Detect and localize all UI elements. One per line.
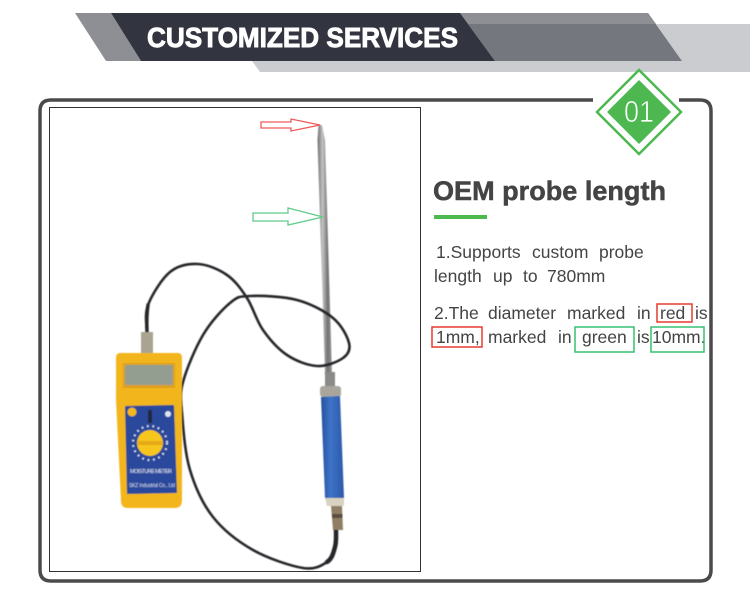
- heading: OEM probe length: [433, 176, 666, 206]
- badge number: 01: [624, 94, 654, 129]
- paragraph 2: is: [637, 327, 650, 347]
- cable: [146, 264, 350, 568]
- paragraph 1: to: [523, 266, 538, 286]
- green highlight boxes: [575, 327, 704, 352]
- paragraph 2: 2.The: [434, 303, 479, 323]
- heading underline: [434, 215, 487, 219]
- probe shaft: [318, 125, 332, 374]
- paragraph 1: up: [493, 266, 512, 286]
- paragraph 1: custom: [532, 242, 588, 262]
- paragraph 2: 1mm,: [436, 327, 480, 347]
- paragraph 2: red: [660, 303, 685, 323]
- paragraph 1: 1.Supports: [436, 242, 521, 262]
- red highlight boxes: [432, 304, 692, 347]
- paragraph 2: diameter: [488, 303, 556, 323]
- paragraph 2: marked: [567, 303, 625, 323]
- green arrow: [253, 208, 323, 225]
- moisture meter: [116, 332, 182, 508]
- red arrow: [261, 119, 320, 131]
- paragraph 2: [432, 303, 708, 352]
- product photo: [50, 108, 420, 572]
- paragraph 2: in: [637, 303, 651, 323]
- banner title: CUSTOMIZED SERVICES: [147, 22, 458, 53]
- meter maker: SKZ Industrial Co., Ltd: [129, 483, 175, 489]
- paragraph 1: length: [434, 266, 482, 286]
- paragraph 2: in: [558, 327, 572, 347]
- header banner: [75, 13, 750, 72]
- paragraph 1: [434, 242, 644, 286]
- probe handle: [320, 372, 344, 530]
- paragraph 1: probe: [599, 242, 644, 262]
- paragraph 1: 780mm: [547, 266, 605, 286]
- paragraph 2: marked: [488, 327, 546, 347]
- meter label: MOISTURE METER: [130, 469, 172, 475]
- main panel frame: [40, 100, 711, 581]
- paragraph 2: 10mm.: [652, 327, 705, 347]
- number badge: [597, 70, 681, 154]
- paragraph 2: green: [582, 327, 627, 347]
- paragraph 2: is: [695, 303, 708, 323]
